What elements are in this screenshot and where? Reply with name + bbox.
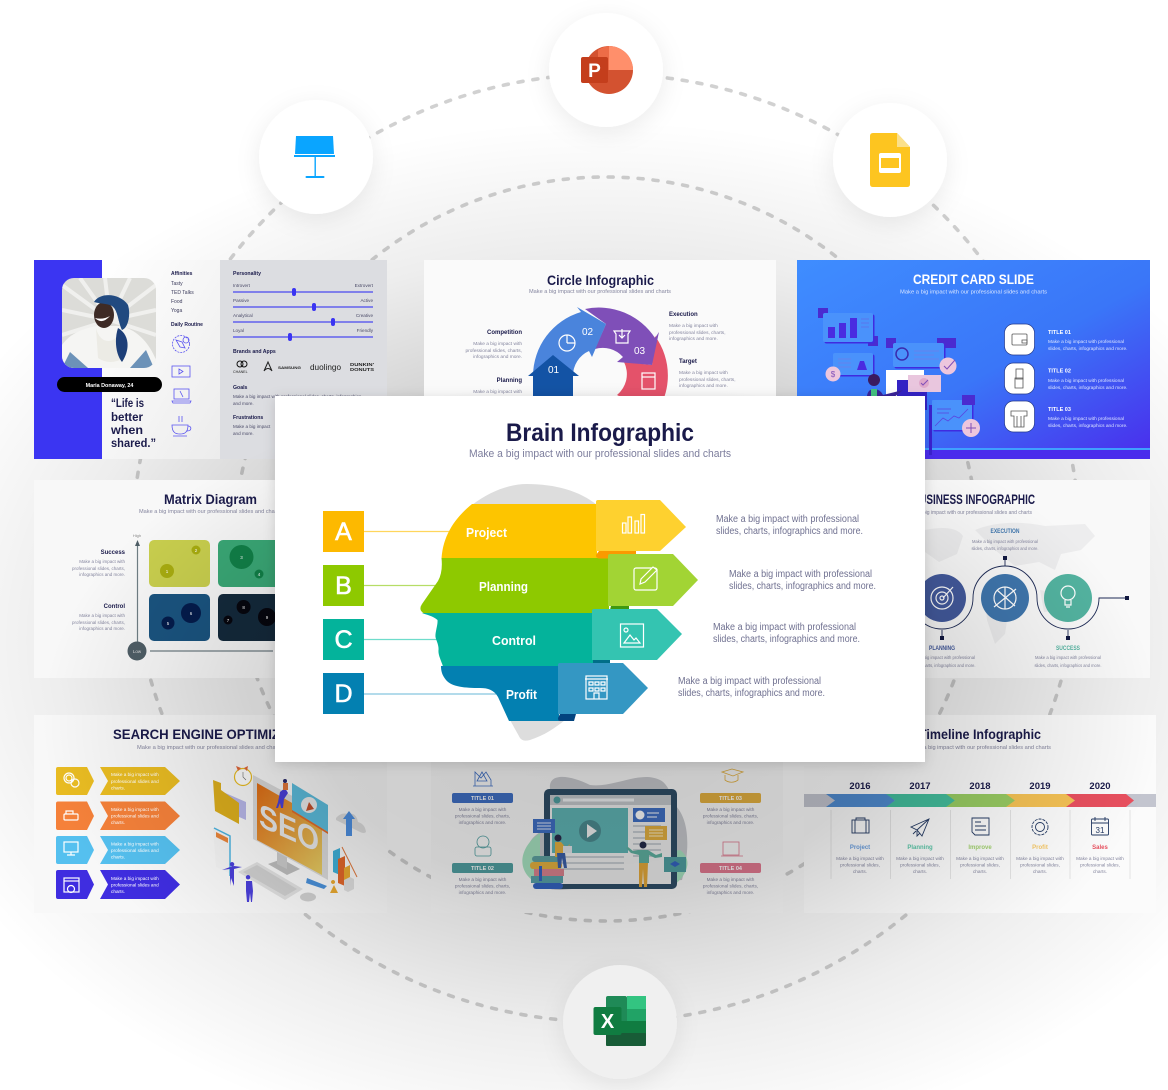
- goals text: and more.: [233, 401, 254, 406]
- main title: Brain Infographic: [506, 419, 694, 447]
- affinities list: Affinities: [171, 271, 193, 277]
- pill text: Make a big impact with: [459, 807, 507, 812]
- year labels: 2016: [849, 781, 871, 792]
- node squares: [940, 556, 1129, 640]
- step labels: PLANNING: [929, 646, 955, 652]
- year labels: 2020: [1089, 781, 1111, 792]
- step text: Make a big impact with professional: [972, 539, 1038, 544]
- icon: powerpoint: [581, 46, 633, 94]
- axis: Low: [133, 649, 142, 654]
- description D: Make a big impact with professional: [678, 676, 821, 687]
- panel: persona slide: [34, 260, 387, 459]
- feature items: TITLE 02: [1048, 368, 1071, 374]
- chevron band: [804, 794, 1156, 807]
- description A: [716, 514, 863, 537]
- quadrants: 4: [258, 572, 261, 577]
- quadrants: 7: [227, 618, 230, 623]
- year labels: 2017: [909, 781, 931, 792]
- label Project: Project: [466, 526, 508, 540]
- quadrants: 2: [195, 548, 198, 553]
- right labels: Target: [679, 359, 697, 365]
- cycle arrows: 01: [548, 365, 560, 376]
- feature items: slides, charts, infographics and more.: [1048, 346, 1127, 352]
- brand logos: DUNKIN': [350, 362, 374, 367]
- dashed outer orbit: [132, 74, 1080, 1022]
- panel: circle infographic slide: [424, 260, 776, 459]
- personality sliders: Active: [360, 298, 373, 303]
- brand logos: [233, 349, 375, 374]
- label Planning: Planning: [479, 580, 528, 594]
- pill icons: [473, 769, 743, 856]
- personality sliders: Loyal: [233, 328, 244, 333]
- pill text: Make a big impact with: [707, 877, 755, 882]
- affinities list: Yoga: [171, 308, 182, 314]
- world map: [925, 523, 1095, 644]
- letter A: [323, 511, 364, 552]
- slide title: SEARCH ENGINE OPTIMIZATION: [113, 726, 320, 742]
- description A: Make a big impact with professional: [716, 514, 859, 525]
- feature items: slides, charts, infographics and more.: [1048, 423, 1127, 429]
- icon: picture: [620, 624, 644, 647]
- quote: shared.”: [111, 438, 156, 450]
- pill text: professional slides, charts,: [703, 814, 758, 818]
- left labels: Make a big impact with: [473, 341, 522, 347]
- slide subtitle: Make a big impact with our professional slides and charts: [900, 290, 1047, 296]
- bottom strip: [797, 448, 1150, 459]
- brand logos: SAMSUNG: [278, 366, 301, 370]
- slide title: BUSINESS INFOGRAPHIC: [912, 491, 1035, 507]
- slide subtitle: Make a big impact with our professional slides and charts: [908, 745, 1051, 751]
- brand logos: Brands and Apps: [233, 349, 276, 355]
- description C: slides, charts, infographics and more.: [713, 634, 860, 645]
- step text: Make a big impact with professional: [909, 655, 975, 660]
- letter C: C: [334, 626, 353, 654]
- pill text: professional slides, charts,: [703, 884, 758, 888]
- step labels: EXECUTION: [990, 529, 1020, 535]
- pill text: Make a big impact with: [707, 807, 755, 812]
- personality sliders: Extrovert: [355, 283, 374, 288]
- badge: powerpoint: [549, 13, 663, 127]
- description C: Make a big impact with professional: [713, 622, 856, 633]
- arrow rows: Make a big impact with: [111, 876, 159, 881]
- column text: professional slides,: [900, 862, 940, 868]
- side labels: Success: [101, 550, 126, 556]
- quadrants: 3: [240, 555, 243, 560]
- arrow rows: professional slides and: [111, 814, 159, 818]
- personality sliders: Creative: [356, 313, 373, 318]
- left labels: [465, 330, 522, 395]
- slide title: CREDIT CARD SLIDE: [913, 272, 1034, 287]
- column text: professional slides,: [1080, 862, 1120, 868]
- illustration: [818, 308, 980, 455]
- badge: keynote: [259, 100, 373, 214]
- connector lines: [364, 532, 496, 694]
- column text: [836, 856, 1124, 874]
- main subtitle: Make a big impact with our professional slides and charts: [469, 448, 731, 460]
- arrow: planning: [608, 554, 698, 614]
- right labels: professional slides, charts,: [679, 377, 736, 383]
- quote: when: [110, 425, 143, 437]
- column text: charts.: [1093, 869, 1107, 874]
- timeline icons: [852, 817, 1108, 836]
- affinities list: TED Talks: [171, 290, 194, 296]
- description B: Make a big impact with professional: [729, 569, 872, 580]
- blob backdrop: [526, 777, 687, 890]
- personality sliders: Introvert: [233, 283, 251, 288]
- step text: slides, charts, infographics and more.: [972, 546, 1038, 551]
- slide subtitle: Make a big impact with our professional slides and charts: [529, 289, 671, 295]
- affinities list: Daily Routine: [171, 322, 203, 328]
- timeline icons: 31: [1096, 826, 1105, 835]
- column text: Make a big impact with: [956, 856, 1004, 861]
- feature items: Make a big impact with professional: [1048, 339, 1124, 345]
- panel: business infographic slide: [890, 480, 1150, 678]
- icon: building: [585, 676, 608, 699]
- right labels: professional slides, charts,: [669, 330, 726, 336]
- soft central shadow over cards: [104, 495, 1097, 913]
- brand logos: duolingo: [310, 363, 342, 372]
- personality sliders: [233, 271, 374, 341]
- personality sliders: Friendly: [357, 328, 374, 333]
- column labels: Sales: [1092, 845, 1108, 851]
- portrait photo: [62, 278, 156, 368]
- description D: slides, charts, infographics and more.: [678, 688, 825, 699]
- tablet: [544, 789, 677, 889]
- arrow rows: charts.: [111, 854, 125, 860]
- title pills: TITLE 04: [719, 866, 743, 872]
- column text: charts.: [1033, 869, 1047, 874]
- cycle arrows: 02: [582, 327, 594, 338]
- letter B: [323, 565, 364, 606]
- pill text: professional slides, charts,: [455, 884, 510, 888]
- icon: pencil square: [634, 567, 657, 590]
- left labels: Make a big impact with: [473, 389, 522, 395]
- routine icons: [172, 336, 191, 436]
- description A: slides, charts, infographics and more.: [716, 526, 863, 537]
- quote: “Life is: [111, 398, 144, 410]
- feature items: slides, charts, infographics and more.: [1048, 385, 1127, 391]
- feature items: Make a big impact with professional: [1048, 378, 1124, 384]
- icon: powerpoint: P: [588, 61, 601, 82]
- quote: [110, 398, 156, 450]
- green blob: [522, 833, 687, 888]
- left labels: Competition: [487, 330, 522, 336]
- illustration: $: [831, 370, 836, 379]
- personality sliders: Passive: [233, 298, 250, 303]
- title pills: TITLE 02: [471, 866, 494, 872]
- name pill: [57, 377, 162, 392]
- quote: better: [111, 412, 144, 424]
- right labels: Make a big impact with: [679, 370, 728, 376]
- axis: [128, 533, 273, 660]
- column labels: Planning: [907, 845, 933, 851]
- column text: Make a big impact with: [836, 856, 884, 861]
- pill text: [455, 807, 758, 895]
- label Control: Control: [492, 634, 536, 648]
- feature items: Make a big impact with professional: [1048, 416, 1124, 422]
- slide title: Timeline Infographic: [919, 726, 1041, 742]
- quadrants: [149, 540, 280, 641]
- arrow rows: charts.: [111, 786, 125, 790]
- icon: excel: X: [601, 1011, 615, 1033]
- column text: Make a big impact with: [1076, 856, 1124, 861]
- panel: learning slide: [431, 715, 783, 913]
- column labels: Profit: [1032, 845, 1048, 851]
- column labels: Project: [850, 845, 870, 851]
- arrow rows: Make a big impact with: [111, 807, 159, 812]
- slide subtitle: Make a big impact with our professional slides and charts: [137, 745, 282, 751]
- panel: timeline slide: [804, 715, 1156, 913]
- quadrants: 9: [266, 615, 269, 620]
- pill text: infographics and more.: [459, 820, 506, 825]
- pill text: professional slides, charts,: [455, 814, 510, 818]
- arrow: project: [596, 500, 686, 558]
- speech bubbles: [533, 819, 686, 872]
- quadrants: 6: [190, 611, 193, 616]
- arrow rows: [56, 767, 180, 899]
- icon: bar chart: [622, 514, 644, 533]
- arrow rows: charts.: [111, 820, 125, 825]
- letter B: B: [335, 572, 352, 600]
- step text: [908, 539, 1102, 668]
- cycle arrows: [528, 307, 668, 440]
- left labels: Planning: [497, 378, 522, 384]
- panel: credit card slide: [797, 260, 1150, 459]
- pill text: infographics and more.: [459, 890, 506, 895]
- description B: [729, 569, 876, 592]
- title pills: TITLE 01: [471, 796, 494, 802]
- badge: google slides: [833, 103, 947, 217]
- column text: professional slides,: [960, 862, 1000, 868]
- left labels: infographics and more.: [473, 354, 522, 360]
- right labels: infographics and more.: [679, 383, 728, 389]
- step text: Make a big impact with professional: [1035, 655, 1101, 660]
- arrow: control: [592, 609, 682, 666]
- arrow rows: professional slides and: [111, 848, 159, 853]
- badge: excel: [563, 965, 677, 1079]
- side labels: infographics and more.: [79, 572, 125, 577]
- column text: charts.: [973, 869, 987, 874]
- goals text: Goals: [233, 385, 248, 391]
- side labels: infographics and more.: [79, 626, 125, 631]
- icon: keynote: [294, 136, 335, 178]
- icon: excel: [594, 996, 646, 1046]
- goals text: Make a big impact with professional slides, charts, infographics: [233, 394, 362, 399]
- label Profit: Profit: [506, 688, 538, 702]
- slide subtitle: Make a big impact with our professional slides and charts: [139, 509, 281, 515]
- column labels: [850, 845, 1108, 851]
- year labels: 2019: [1029, 781, 1051, 792]
- right labels: [669, 312, 736, 389]
- brand logos: CHANEL: [233, 370, 248, 374]
- step text: slides, charts, infographics and more.: [908, 663, 976, 668]
- column text: professional slides,: [840, 862, 880, 868]
- letter D: [323, 673, 364, 714]
- arrow rows: professional slides and: [111, 882, 159, 888]
- arrow rows: Make a big impact with: [111, 772, 159, 777]
- description C: [713, 622, 860, 645]
- goals text: [233, 385, 362, 436]
- step circles: [918, 574, 1092, 622]
- column text: professional slides,: [1020, 862, 1060, 868]
- panel: brain infographic main card: [275, 396, 925, 762]
- columns: [831, 810, 1130, 879]
- head silhouette: [420, 484, 609, 741]
- connecting curve: [911, 566, 1127, 629]
- right labels: Execution: [669, 312, 698, 318]
- arrow rows: Make a big impact with: [111, 842, 159, 846]
- side labels: [72, 550, 126, 631]
- arrow rows: professional slides and: [111, 779, 159, 784]
- slide title: Matrix Diagram: [164, 492, 257, 507]
- side labels: Make a big impact with: [79, 559, 125, 564]
- title pills: [452, 793, 761, 873]
- side labels: Make a big impact with: [79, 613, 125, 618]
- icon: google slides: [870, 133, 910, 187]
- cycle arrows: 03: [634, 346, 646, 357]
- goals text: Make a big impact: [233, 424, 271, 429]
- letter A: A: [335, 518, 352, 546]
- arrow: profit: [558, 663, 648, 721]
- step text: slides, charts, infographics and more.: [1034, 663, 1102, 668]
- name pill: Maria Donaway, 24: [86, 383, 133, 389]
- pill text: Make a big impact with: [459, 877, 507, 882]
- dashed inner orbit: [234, 177, 978, 921]
- slide subtitle: Make a big impact with our professional slides and charts: [905, 510, 1032, 516]
- quadrants: 1: [166, 569, 169, 574]
- node stems: [942, 558, 1068, 638]
- pill text: infographics and more.: [707, 890, 754, 895]
- affinities list: [171, 271, 203, 328]
- goals text: Frustrations: [233, 415, 263, 421]
- year labels: [849, 781, 1111, 792]
- letter C: [323, 619, 364, 660]
- seo illustration: [213, 766, 366, 902]
- step labels: [929, 529, 1080, 652]
- side labels: professional slides, charts,: [72, 620, 125, 625]
- seo illustration: SEO: [259, 797, 319, 860]
- description D: [678, 676, 825, 699]
- arrow rows: charts.: [111, 889, 125, 894]
- personality sliders: Analytical: [233, 313, 253, 318]
- step labels: SUCCESS: [1056, 646, 1080, 652]
- column text: charts.: [913, 869, 927, 874]
- side labels: professional slides, charts,: [72, 566, 125, 571]
- personality sliders: Personality: [233, 271, 261, 277]
- pill text: infographics and more.: [707, 820, 754, 825]
- description B: slides, charts, infographics and more.: [729, 581, 876, 592]
- panel: matrix diagram slide: [34, 480, 294, 678]
- left labels: professional slides, charts,: [465, 348, 522, 354]
- axis: High: [133, 533, 141, 538]
- right labels: infographics and more.: [669, 336, 718, 342]
- feature items: TITLE 01: [1048, 330, 1071, 336]
- column text: Make a big impact with: [896, 856, 944, 861]
- affinities list: Tasty: [171, 281, 183, 287]
- right labels: Make a big impact with: [669, 323, 718, 329]
- side labels: Control: [104, 604, 125, 610]
- year labels: 2018: [969, 781, 991, 792]
- title pills: TITLE 03: [719, 796, 742, 802]
- panel: seo slide: [34, 715, 387, 913]
- column text: charts.: [853, 869, 867, 874]
- column text: Make a big impact with: [1016, 856, 1064, 861]
- quadrants: 5: [167, 621, 170, 626]
- quadrants: 8: [242, 605, 245, 610]
- people and books: [530, 834, 662, 889]
- slide title: Circle Infographic: [547, 272, 654, 288]
- goals text: and more.: [233, 431, 254, 436]
- feature items: [1004, 324, 1127, 432]
- affinities list: Food: [171, 299, 183, 305]
- feature items: TITLE 03: [1048, 407, 1071, 413]
- brand logos: DONUTS: [350, 367, 375, 373]
- column labels: Improve: [968, 845, 992, 851]
- letter D: D: [334, 680, 353, 708]
